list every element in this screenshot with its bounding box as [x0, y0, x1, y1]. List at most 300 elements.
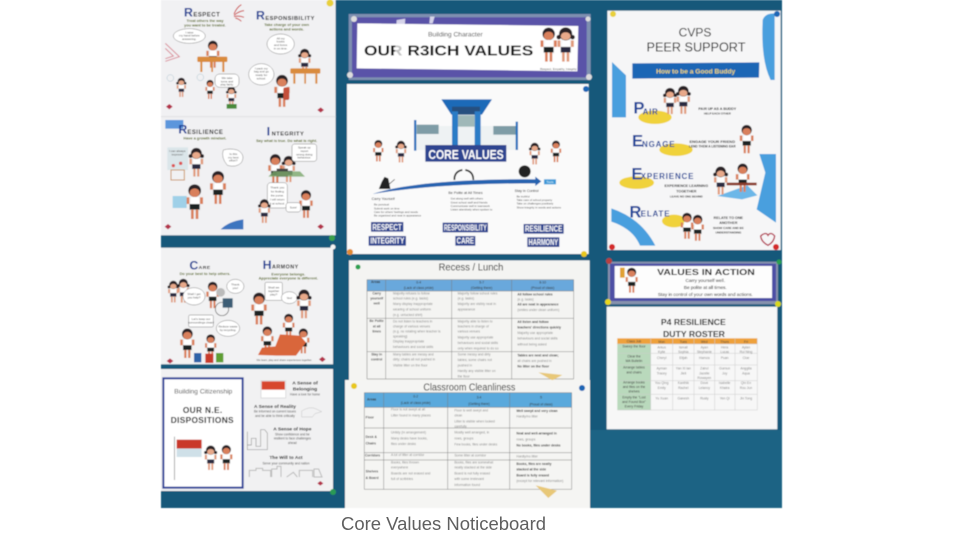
title: our N.E. dispositions — [171, 405, 234, 425]
heading: responsibility: actions and words. — [269, 27, 304, 31]
table grid: Display inappropriate — [393, 340, 424, 344]
section: engage: ENGAGE YOUR FRIEND — [689, 139, 735, 144]
roster grid: Clear the — [627, 354, 641, 358]
table grid: (e.g. tasks) — [458, 297, 474, 301]
roster grid: Kanthik — [678, 381, 689, 385]
table grid: Untidy (in arrangement) — [391, 431, 426, 435]
text: carry yourself: Submit work on time — [374, 206, 400, 210]
roster grid: and chairs — [626, 371, 642, 375]
table grid: Books, files are neatly — [516, 462, 552, 466]
heading: respect: you want to be treated. — [184, 23, 226, 27]
table grid: 5-7 — [479, 281, 484, 285]
table grid: information found — [454, 483, 480, 487]
illustration: responsibility scene — [249, 34, 324, 113]
heading: responsibility: ESPONSIBILITY — [265, 16, 315, 22]
roster grid: MA Bulletin — [626, 359, 642, 363]
illustration: integrity scene — [258, 144, 324, 229]
illustration: resilience scene: Is this — [229, 152, 238, 156]
text: be polite: Listen attentively when spoken to — [451, 208, 493, 212]
section: engage: E — [632, 132, 643, 151]
arrow — [373, 177, 541, 194]
illustration: respect scene: I raise — [185, 30, 194, 34]
poster: core values — [347, 84, 589, 254]
table grid: all chairs are pushed in — [517, 359, 552, 363]
table grid: clean — [454, 414, 462, 418]
heading: resilience — [165, 120, 226, 140]
table grid: Majority able to listen to — [458, 319, 493, 323]
text: sense of hope: ahead — [288, 441, 297, 445]
illustration: integrity scene: report — [300, 149, 308, 153]
banner: how to be a good buddy — [632, 62, 759, 79]
icon: two students — [204, 445, 232, 470]
heading: recess / lunch: Recess / Lunch — [439, 262, 503, 273]
icon: brackets — [454, 170, 473, 180]
table grid: (Getting there) — [471, 286, 492, 290]
heading — [661, 317, 726, 339]
illustration: integrity scene: behaviour. — [297, 156, 311, 160]
text: sense of hope — [247, 427, 312, 450]
section: experience — [619, 163, 757, 199]
roster grid: Ismail — [679, 345, 688, 349]
text: sense of belonging: Belonging — [293, 387, 317, 393]
table grid: Chairs — [366, 441, 376, 445]
table grid: Majority follow school rules — [458, 292, 498, 296]
banner: values in action — [608, 262, 778, 304]
illustration: harmony scene: Yes! — [286, 296, 292, 300]
illustration: integrity scene: for finding — [271, 189, 284, 193]
roster grid: Yen Qi — [720, 397, 730, 401]
panel: our N.E. dispositions — [161, 369, 333, 491]
table: recess lunch — [349, 260, 590, 380]
section: relate: RELATE TO ONE — [714, 216, 744, 220]
roster grid: Emily — [658, 386, 666, 390]
text: be polite — [448, 191, 493, 212]
roster grid: Thurs — [720, 340, 729, 344]
table grid: Visible litter on the floor — [393, 363, 428, 367]
section: engage: LEND THEM A LISTENING EAR — [689, 145, 736, 149]
text: carry yourself: Care for others' feelings and needs — [374, 210, 419, 214]
section: pair: PAIR UP AS A BUDDY — [698, 107, 737, 111]
illustration: harmony scene: together — [268, 289, 279, 293]
heading: care — [180, 259, 230, 276]
roster grid: Puan — [721, 356, 729, 360]
heading: integrity: Say what is true. Do what is right. — [256, 139, 317, 143]
table grid: Mostly well arranged, in — [454, 431, 489, 435]
tags: value names: INTEGRITY — [370, 237, 405, 246]
text lines: Carry yourself well. — [686, 278, 725, 283]
table grid: Desk & — [366, 435, 378, 439]
text lines — [658, 278, 753, 297]
table grid: (Proud of class) — [531, 286, 554, 290]
table grid: everywhere — [391, 466, 408, 470]
table grid: Majority use appropriate — [517, 331, 553, 335]
table grid: Floor — [366, 415, 375, 419]
illustration: responsibility scene: ready for — [255, 73, 267, 77]
text: sense of hope: Show confidence and be — [275, 432, 310, 436]
icon: students — [373, 140, 561, 164]
illustration: harmony scene — [251, 282, 312, 362]
illustration: integrity scene: it at school. — [270, 201, 285, 205]
roster grid: Wed — [701, 340, 708, 344]
table grid: full of scribbles — [391, 477, 413, 481]
pins — [326, 0, 782, 495]
illustration: respect scene: turns and — [221, 79, 234, 83]
heading: integrity: NTEGRITY — [272, 131, 304, 137]
table grid: Hardly any visible litter on — [458, 369, 496, 373]
text: carry yourself: Be punctual — [374, 203, 389, 207]
table grid: dirty; chairs all not pushed in — [393, 358, 435, 362]
roster grid: Aqua — [742, 371, 750, 375]
roster grid: Joy — [722, 371, 728, 375]
illustration: respect scene: play fairly. — [220, 83, 234, 87]
glare on banner — [395, 17, 435, 59]
heading: integrity — [256, 124, 317, 143]
heading: respect — [184, 6, 226, 27]
section: relate: ANOTHER — [719, 221, 738, 225]
illustration: harmony scene: play? — [270, 293, 278, 297]
text: stay in control: Take care of school property — [517, 198, 553, 202]
heading: harmony: ARMONY — [272, 264, 299, 270]
heading: VALUES IN ACTION — [657, 267, 755, 277]
table grid: Litter is visible when looked — [454, 420, 495, 424]
text: be polite: Greet school staff and friends — [451, 200, 488, 204]
noticeboard photo — [161, 0, 782, 508]
section: experience: XPERIENCE — [641, 172, 694, 181]
text: sense of reality: Be informed on current issues — [254, 410, 296, 414]
illustration: responsibility scene: in on time. — [274, 46, 288, 50]
roster grid: Sophia — [678, 350, 689, 354]
roster grid: and Found Box" — [622, 400, 647, 404]
table grid: appearance — [458, 307, 475, 311]
text: the will to act — [249, 455, 322, 477]
title: CVPS — [679, 26, 711, 40]
roster grid: Aylan — [742, 345, 750, 349]
roster grid: Lucas — [720, 350, 729, 354]
table grid: 3-4 — [477, 396, 482, 400]
text: carry yourself — [372, 197, 422, 218]
roster grid: Rou Jun — [740, 386, 752, 390]
table grid: Areas — [371, 280, 380, 284]
text lines: Stay in control of your own words and actions. — [658, 292, 753, 297]
text: carry yourself: Carry Yourself — [372, 197, 396, 201]
table grid: Floor is well swept and — [454, 408, 488, 412]
text: sense of belonging: Have a love for home — [290, 393, 320, 397]
caption: Core Values Noticeboard — [341, 514, 546, 534]
illustration: respect scene: my hand before — [179, 34, 200, 38]
roster grid: Yan Xi Ian — [676, 366, 691, 370]
table grid: behaviours and social skills — [517, 337, 558, 341]
illustration: responsibility scene: I pack my — [255, 66, 268, 70]
table grid: speaking) — [393, 334, 407, 338]
table grid: Shelves — [366, 469, 378, 473]
table grid: control — [371, 358, 382, 362]
table grid: Litter found in many places — [391, 414, 431, 418]
tags: value names: CARE — [457, 237, 475, 246]
table grid: Majority are visibly neat in — [458, 302, 496, 306]
tags: value names: RESPECT — [372, 223, 402, 232]
table grid: various venues — [458, 329, 480, 333]
section: relate: SHOW CARE AND BE — [713, 226, 744, 230]
roster grid: Rui Ning — [740, 350, 753, 354]
table grid: A lot of litter at corridor — [391, 453, 425, 457]
table grid: Well swept and very clean — [516, 409, 558, 413]
table grid: without being asked — [517, 342, 547, 346]
roster grid: Cloe — [743, 356, 750, 360]
table grid: pushed in — [458, 363, 472, 367]
illustration: respect scene — [166, 29, 239, 109]
heading: care: ARE — [199, 265, 211, 271]
icon: paper plane — [536, 485, 557, 498]
text: sense of hope: resilient to face challenges — [274, 437, 311, 441]
table grid: Neat and well-arranged in — [516, 432, 557, 436]
roster grid: Mon — [658, 340, 665, 344]
text: sense of reality: A Sense of Reality — [254, 404, 296, 410]
icon: flag — [174, 437, 202, 480]
table grid: All listen and follow — [517, 320, 549, 324]
icon: student with trophy — [620, 268, 638, 293]
table grid: the floor — [458, 375, 471, 379]
illustration: responsibility scene: All my — [277, 36, 285, 40]
illustration: integrity scene: Speak up — [298, 146, 311, 150]
table grid: Board is not fully erased — [454, 472, 490, 476]
section: relate: ELATE — [641, 210, 670, 219]
table grid: (Getting there) — [468, 402, 490, 406]
table grid: 0-2 — [413, 394, 418, 398]
table grid: at all — [373, 324, 381, 328]
table grid: Carry — [372, 292, 381, 296]
table grid: teachers in charge of — [458, 324, 489, 328]
illustration: care scene: Thank — [231, 283, 240, 287]
table grid: Books, files thrown — [391, 460, 419, 464]
illustration: integrity scene: wrong doing — [296, 152, 313, 156]
text lines: Be polite at all times. — [684, 285, 727, 290]
section: experience: TOGETHER — [676, 190, 697, 194]
table grid: rows, groups — [516, 438, 536, 442]
text: sense of reality: and be able to think critically — [255, 414, 295, 418]
illustration: integrity scene: I will return — [270, 197, 285, 201]
text: be polite: Be Polite at All Times — [448, 191, 483, 195]
table grid: 5 — [540, 396, 542, 400]
icon: school building — [414, 99, 518, 151]
table grid: Few books, files under desks — [454, 443, 498, 447]
roster grid: You Qing — [655, 381, 669, 385]
table grid: 8-10 — [539, 281, 546, 285]
roster grid: Gurnun — [719, 366, 730, 370]
table grid: Boards are not erased and — [391, 472, 431, 476]
tags: value names: RESILIENCE — [525, 225, 563, 234]
icon: head with gear — [519, 165, 531, 177]
illustration: respect scene: answering. — [182, 37, 197, 41]
banner: our R3ICH values: Respect, Empathy, Integrity — [540, 67, 577, 71]
roster grid: Hera — [721, 345, 728, 349]
section: relate — [629, 203, 744, 241]
heading: resilience: R — [178, 123, 187, 137]
panel: care and harmony — [161, 248, 333, 364]
table grid: (smiles under clean uniform) — [517, 308, 559, 312]
board background — [161, 0, 782, 508]
illustration: care scene: by recycling. — [220, 328, 236, 332]
roster grid: Jieli — [680, 371, 686, 375]
table: duty roster — [607, 307, 777, 429]
illustration: resilience scene — [165, 147, 243, 229]
table grid: Areas — [367, 398, 376, 402]
roster grid: Ganesh — [677, 397, 689, 401]
heading: integrity: I — [267, 124, 270, 138]
roster grid: Arkus — [657, 345, 666, 349]
table grid: & Board — [366, 476, 379, 480]
table grid: All are neat in appearance — [517, 303, 559, 307]
text: be polite: Communicate well in teamwork — [451, 204, 490, 208]
text: be polite: Get along well with others — [451, 197, 484, 201]
roster grid: Kylie — [658, 350, 665, 354]
table grid: Be Polite — [370, 319, 384, 323]
table grid: Stay in — [371, 352, 382, 356]
roster grid: Zairul — [700, 366, 709, 370]
roster grid: Hamza — [699, 356, 710, 360]
table grid: (e.g. tasks) — [517, 298, 534, 302]
text: stay in control — [515, 189, 562, 209]
banner: our R3ICH values — [349, 14, 591, 80]
text: the will to act: Serve your community and nation — [262, 461, 310, 465]
title — [647, 26, 746, 55]
illustration: resilience scene: my best — [228, 155, 239, 159]
decoration: red swooshes — [234, 5, 244, 21]
table grid: behaviours and social skills — [393, 345, 434, 349]
roster grid: Arrange books — [623, 380, 645, 384]
table grid: Floor is not swept at all — [391, 407, 425, 411]
roster grid: Tues — [680, 340, 687, 344]
heading: P4 RESILIENCE — [661, 317, 726, 327]
table grid: (e.g. no rotating when teacher is — [393, 329, 441, 333]
illustration: care scene: you! — [233, 286, 238, 290]
tags: value names — [369, 222, 564, 247]
heading: care: Do your best to help others. — [180, 272, 230, 276]
illustration: integrity scene: Thank you — [270, 185, 285, 189]
icon: school crest — [761, 233, 775, 245]
heading: harmony: Appreciate everyone is different. — [259, 277, 318, 281]
section: experience: E — [631, 164, 642, 183]
heading: harmony — [259, 258, 318, 281]
section: relate: R — [629, 203, 641, 222]
illustration: harmony scene: We learn, play and share experiences together. — [257, 358, 312, 362]
tags: value names: HARMONY — [529, 238, 558, 247]
roster grid: and files on the — [623, 385, 645, 389]
roster grid: Tracey — [657, 371, 667, 375]
inner framed poster — [163, 378, 243, 488]
table grid: No litter on the floor — [517, 365, 550, 369]
text: stay in control: Take on challenges positively — [517, 202, 554, 206]
table grid: only when required to do so — [458, 347, 499, 351]
table: classroom cleanliness — [345, 380, 590, 508]
heading: classroom cleanliness: Classroom Cleanliness — [423, 383, 515, 394]
table grid: Hardly/no litter — [516, 455, 539, 459]
heading: responsibility — [256, 8, 315, 31]
roster grid: Stephanie — [697, 350, 712, 354]
heading: building citizenship: Building Citizenship — [174, 389, 233, 396]
table grid: Some messy and dirty — [458, 352, 491, 356]
table grid: Books, files are somewhat — [454, 460, 493, 464]
illustration: resilience scene: improve! — [172, 152, 183, 156]
table grid — [364, 393, 572, 489]
text: sense of hope: A Sense of Hope — [273, 427, 312, 433]
table grid: carefully — [454, 425, 467, 429]
roster grid: Lelancy — [699, 386, 710, 390]
roster grid: Jin Tong — [740, 397, 752, 401]
section: experience: LEAVE NO ONE BEHIND — [670, 195, 703, 199]
table grid: 0-4 — [416, 281, 421, 285]
section: engage — [632, 125, 753, 156]
icon: paper plane — [538, 372, 562, 380]
roster grid: shelves — [628, 390, 640, 394]
roster grid: Isabelle — [719, 381, 731, 385]
icon: two students in uniform — [540, 27, 575, 62]
roster grid — [617, 338, 757, 410]
heading: respect: R — [184, 6, 193, 20]
table grid: (except for relevant information) — [516, 479, 563, 483]
table grid: (Proud of class) — [529, 403, 553, 407]
title: our R3ICH values: OUR R3ICH VALUES — [364, 44, 534, 60]
illustration: integrity scene: Sure! — [290, 206, 297, 210]
tags: value names: RESPONSIBILITY — [444, 223, 487, 232]
roster grid: Cheryl — [657, 356, 667, 360]
roster grid: Rusty — [700, 397, 709, 401]
table grid: with some irrelevant — [454, 477, 484, 481]
roster grid: Class Job — [627, 339, 641, 343]
text: carry yourself: Be organized and neat in appearance — [374, 214, 422, 218]
roster grid: Empty the "Lost — [622, 395, 646, 399]
illustration: care scene: Shall I get — [187, 292, 201, 296]
table grid: (Lack of class pride) — [401, 401, 431, 405]
table grid: Some litter at corridor — [454, 454, 487, 458]
heading: respect: Treat others the way — [186, 19, 224, 23]
icon: presenter — [379, 177, 395, 189]
table grid: behaviours and social skills — [458, 341, 498, 345]
illustration: care scene: Reduce waste — [219, 325, 238, 329]
roster grid: Sweep the floor — [622, 344, 646, 348]
roster grid: Rachel — [678, 386, 689, 390]
roster grid: Yu Xuan — [655, 397, 668, 401]
table grid: No books, files under desks — [516, 443, 561, 447]
table grid: Many desks have books, — [391, 436, 428, 440]
section: engage: NGAGE — [642, 140, 675, 149]
heading: responsibility: R — [256, 8, 265, 22]
table grid: Majority use appropriate — [458, 335, 494, 339]
text: sense of reality — [254, 404, 322, 418]
heading: harmony: Everyone belongs. — [271, 272, 305, 276]
table grid: stacked at the side — [516, 467, 546, 471]
text: stay in control: Be truthful — [517, 194, 530, 198]
illustration: harmony scene: Shall we — [268, 285, 280, 289]
table grid — [367, 280, 574, 379]
table grid: well — [373, 302, 380, 306]
table grid: Do not listen to teachers in — [393, 319, 433, 323]
title: PEER SUPPORT — [647, 41, 746, 55]
tag: arrow label: Tools — [547, 180, 554, 184]
table grid: neatly stacked at the side — [454, 466, 492, 470]
heading: resilience: ESILIENCE — [187, 130, 223, 136]
illustration: responsibility scene: and forms — [274, 43, 288, 47]
heading: DUTY ROSTER — [663, 329, 726, 339]
roster grid: Rowayen — [697, 376, 711, 380]
panel: respect, responsibility, resilience, integrity — [161, 0, 336, 235]
table grid: files under desks — [391, 442, 416, 446]
illustration: care scene: you help? — [188, 295, 201, 299]
roster grid: Arrange tables — [623, 366, 645, 370]
title: our N.E. dispositions: OUR N.E. — [183, 405, 223, 415]
table grid: Many tables are messy and — [393, 352, 434, 356]
roster grid: Fri — [744, 340, 748, 344]
table grid: times — [372, 330, 381, 334]
